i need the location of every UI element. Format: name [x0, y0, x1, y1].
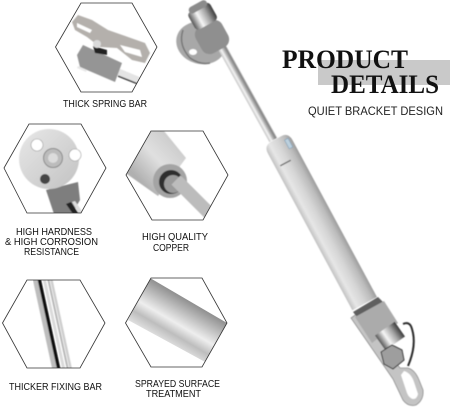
collar ring [353, 297, 383, 317]
label: high quality copper: HIGH QUALITY [142, 232, 208, 243]
label: thick spring bar: THICK SPRING BAR [63, 99, 147, 110]
hexagon outline [56, 3, 157, 92]
hexagon: sprayed surface treatment [126, 278, 230, 367]
spring clip [403, 323, 414, 366]
label: high hardness and corrosion resistance: RESISTANCE [24, 247, 79, 258]
bottom collar [355, 301, 398, 343]
title block [282, 45, 450, 118]
cylinder body [264, 132, 377, 310]
gas strut product photo [171, 0, 423, 405]
label: high hardness and corrosion resistance [5, 227, 98, 258]
label: high quality copper: COPPER [153, 243, 189, 254]
chrome bolt [375, 322, 405, 350]
hexagon outline [126, 131, 228, 220]
subtitle: QUIET BRACKET DESIGN [308, 104, 443, 118]
label: sprayed surface treatment: SPRAYED SURFACE [135, 379, 220, 390]
grey end block [192, 17, 232, 57]
spring bar detail photo [72, 15, 150, 84]
bottom bracket plate [351, 313, 423, 405]
hexagon outline [2, 280, 105, 368]
label: high hardness and corrosion resistance: & HIGH CORROSION [5, 237, 98, 248]
cylinder end detail photo [124, 128, 212, 216]
heading: details: DETAILS [331, 70, 439, 99]
label: thicker fixing bar: THICKER FIXING BAR [9, 382, 102, 393]
bracket disc detail photo [19, 129, 84, 214]
hexagon: thicker fixing bar [2, 278, 105, 370]
hexagon: high hardness [4, 124, 106, 214]
hexagon: high quality copper [124, 128, 228, 220]
chrome end cap [185, 0, 218, 31]
piston rod [215, 40, 277, 142]
heading: product: PRODUCT [282, 45, 408, 74]
label: high hardness and corrosion resistance: HIGH HARDNESS [16, 227, 92, 238]
label: high quality copper [142, 232, 208, 254]
sprayed surface detail photo [128, 278, 230, 363]
label: sprayed surface treatment [135, 379, 220, 400]
fixing bar detail photo [35, 278, 71, 370]
hexagon: thick spring bar [56, 3, 157, 92]
label: sprayed surface treatment: TREATMENT [146, 389, 201, 400]
title highlight bar [318, 60, 450, 85]
hexagon outline [4, 124, 106, 213]
hex nut [381, 345, 404, 369]
mounting plate [171, 16, 231, 70]
hexagon outline [126, 278, 227, 367]
